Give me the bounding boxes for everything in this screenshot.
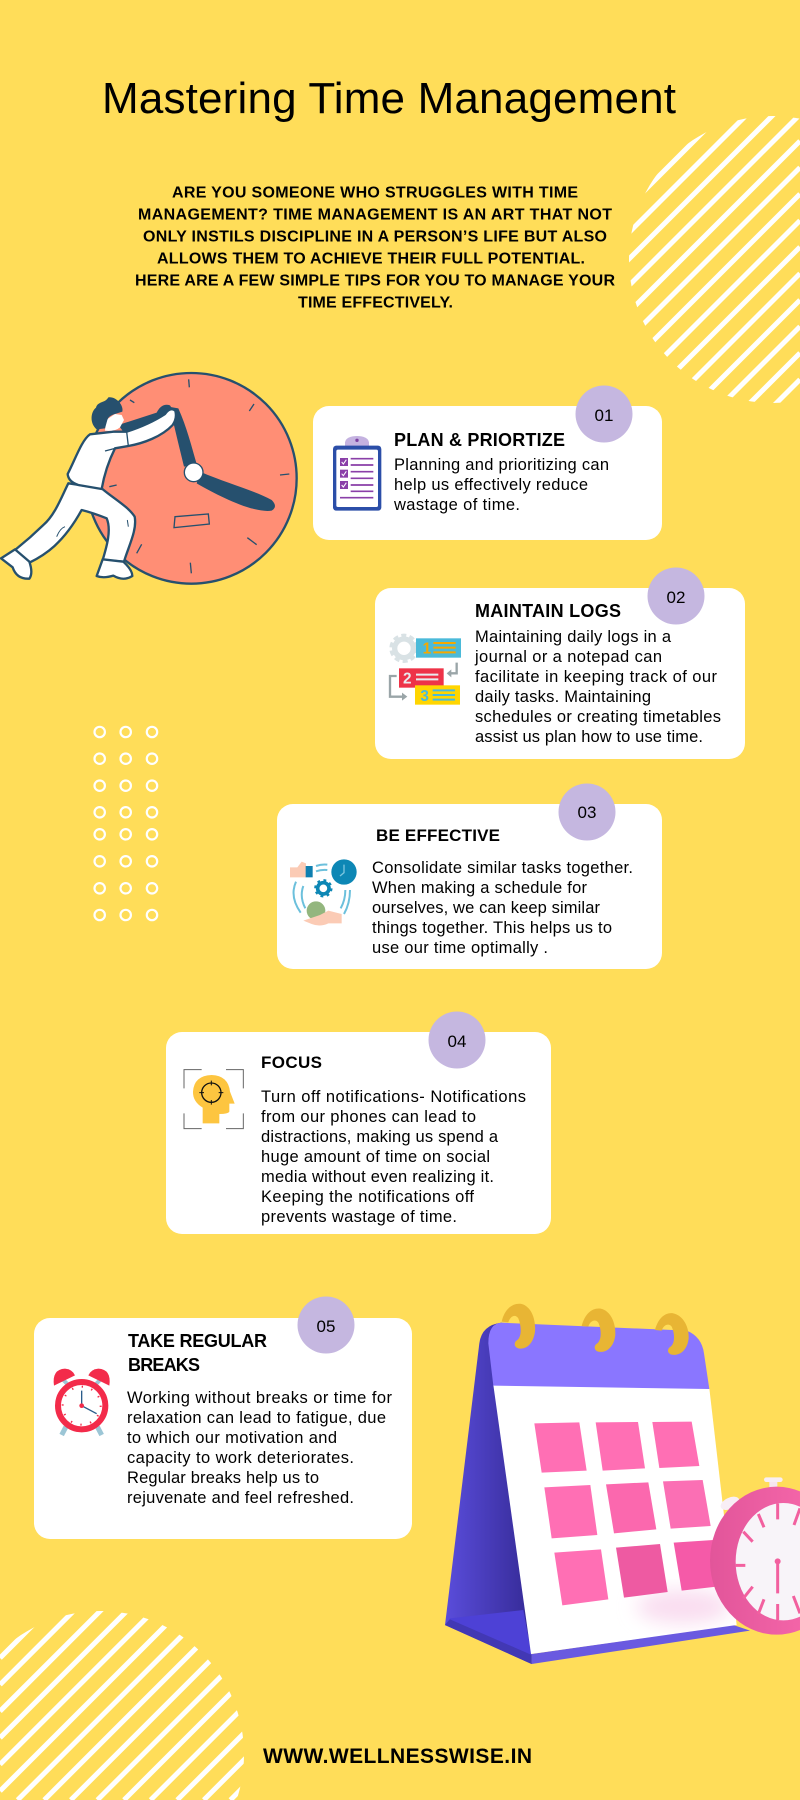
intro text block: TIME EFFECTIVELY. [298,295,453,312]
icon: alarm clock [54,1369,110,1435]
footer website: WWW.WELLNESSWISE.IN [263,1745,532,1768]
body text: capacity to work deteriorates. [127,1449,354,1467]
body text: things together. This helps us to [372,919,612,937]
body text: distractions, making us spend a [261,1128,499,1146]
body text: use our time optimally . [372,939,548,957]
body text: Regular breaks help us to [127,1469,319,1487]
body text: to which our motivation and [127,1429,337,1447]
intro text block: MANAGEMENT? TIME MANAGEMENT IS AN ART THAT NOT [138,207,612,224]
body text: from our phones can lead to [261,1108,476,1126]
body text: media without even realizing it. [261,1168,494,1186]
intro text block: ONLY INSTILS DISCIPLINE IN A PERSON’S LIFE BUT ALSO [143,229,607,246]
number badge 02 [648,568,704,624]
panel: tip 03 be effective [277,784,662,969]
heading: BREAKS [128,1355,200,1375]
body text: help us effectively reduce [394,476,588,494]
number badge 04 [428,1012,486,1068]
intro text block: HERE ARE A FEW SIMPLE TIPS FOR YOU TO MANAGE YOUR [135,273,615,290]
icon: numbered process steps [390,636,461,705]
heading: MAINTAIN LOGS [475,601,621,621]
panel: tip 05 take regular breaks [34,1296,412,1539]
heading [128,1331,267,1375]
body text: assist us plan how to use time. [475,728,703,746]
heading: FOCUS [261,1053,322,1072]
icon: numbered process steps: 3 [420,688,429,705]
body text: facilitate in keeping track of our [475,668,718,686]
icon: clipboard checklist [333,436,381,511]
decorative dot grid [94,727,157,920]
decorative striped circle: bottom left [0,1611,244,1800]
title: Mastering Time Management [102,74,676,123]
illustration: desk calendar with stopwatch [445,1304,800,1664]
body text: wastage of time. [393,496,520,514]
body text: Consolidate similar tasks together. [372,859,633,877]
body text: journal or a notepad can [474,648,662,666]
body text [393,456,609,514]
heading: PLAN & PRIORTIZE [394,430,565,450]
panel: tip 01 plan and prioritize [313,386,662,540]
panel: tip 02 maintain logs [375,568,745,759]
decorative striped circle: top right [629,116,800,403]
icon: numbered process steps: 2 [403,671,412,688]
body text: Keeping the notifications off [261,1188,474,1206]
body text [474,628,721,746]
body text: huge amount of time on social [261,1148,490,1166]
body text: ourselves, we can keep similar [372,899,600,917]
body text: Turn off notifications- Notifications [261,1088,526,1106]
body text: Planning and prioritizing can [394,456,609,474]
icon: head with target [184,1070,243,1129]
body text: relaxation can lead to fatigue, due [127,1409,386,1427]
intro text block [135,185,615,312]
icon: effective hands, clock and gear [290,859,357,926]
heading: TAKE REGULAR [128,1331,267,1351]
intro text block: ALLOWS THEM TO ACHIEVE THEIR FULL POTENTIAL. [157,251,585,268]
number badge 02: 02 [667,588,685,607]
number badge 03 [558,784,616,840]
stopwatch [710,1477,800,1635]
body text: prevents wastage of time. [261,1208,457,1226]
illustration: person pushing clock [1,373,297,584]
number badge 05: 05 [317,1317,335,1336]
body text [127,1389,392,1507]
number badge 01 [576,386,632,442]
body text: daily tasks. Maintaining [475,688,651,706]
number badge 01: 01 [595,406,613,425]
number badge 05 [298,1296,354,1354]
number badge 03: 03 [578,803,596,822]
heading: BE EFFECTIVE [376,826,500,845]
icon: numbered process steps: 1 [423,641,432,658]
body text: When making a schedule for [372,879,588,897]
body text [261,1088,526,1226]
body text: Maintaining daily logs in a [475,628,672,646]
body text [372,859,633,957]
panel: tip 04 focus [166,1012,551,1234]
body text: rejuvenate and feel refreshed. [127,1489,354,1507]
intro text block: ARE YOU SOMEONE WHO STRUGGLES WITH TIME [172,185,578,202]
body text: Working without breaks or time for [127,1389,392,1407]
number badge 04: 04 [448,1032,466,1051]
body text: schedules or creating timetables [475,708,721,726]
